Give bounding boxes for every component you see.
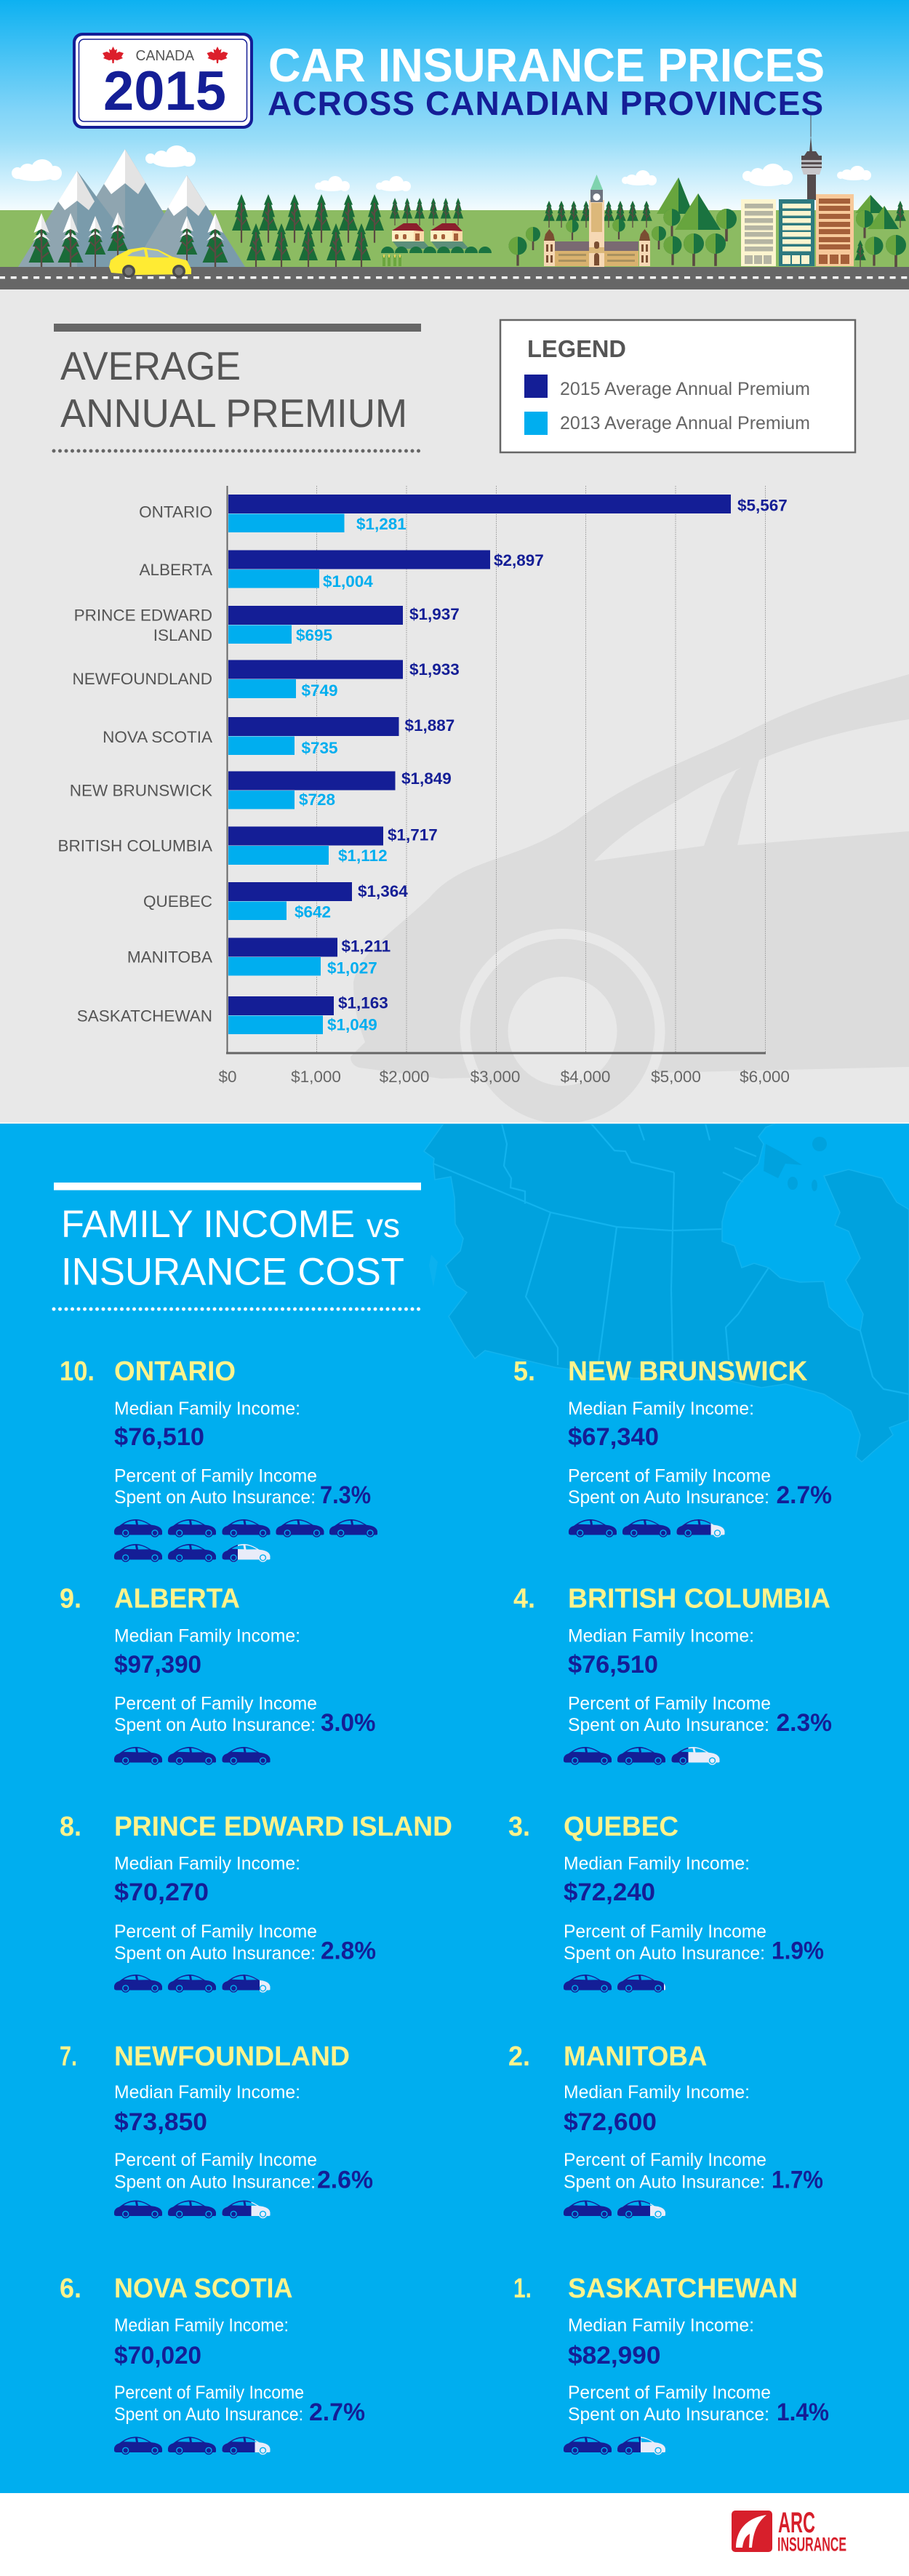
icon: car row (564, 2436, 665, 2455)
bars: British Columbia (57, 826, 438, 865)
bars: Alberta: $1,004 (323, 572, 373, 591)
icon: car row (114, 1975, 271, 1993)
rank 1: Saskatchewan: SASKATCHEWAN (568, 2273, 798, 2304)
rank 6: Nova Scotia: Median Family Income: (114, 2316, 289, 2336)
rank 8: Prince Edward Island: $70,270 (114, 1879, 209, 1906)
rank 2: Manitoba: Median Family Income: (564, 2082, 750, 2103)
bar chart (57, 486, 790, 1086)
title (268, 39, 825, 122)
rank 2: Manitoba: MANITOBA (564, 2041, 707, 2072)
legend: 2013 Average Annual Premium (560, 413, 810, 433)
CN tower (801, 115, 822, 200)
x axis labels: $1,000 (291, 1068, 341, 1086)
bars: Ontario: $1,281 (356, 515, 407, 533)
car watermark (351, 674, 909, 1129)
bars: Nova Scotia: $735 (301, 739, 338, 757)
rank 7: Newfoundland: Spent on Auto Insurance: (114, 2172, 316, 2192)
rank 4: British Columbia: Spent on Auto Insurance: (568, 1715, 769, 1735)
footer logo: ARC Insurance: INSURANCE (777, 2534, 846, 2556)
pine forest (232, 194, 463, 273)
bars: Newfoundland: $1,933 (409, 660, 460, 679)
rank 4: British Columbia: BRITISH COLUMBIA (568, 1584, 830, 1615)
bars: Ontario: $5,567 (737, 496, 788, 515)
legend: 2015 Average Annual Premium (560, 379, 810, 399)
rank 5: New Brunswick: NEW BRUNSWICK (568, 1356, 808, 1387)
rank 3: Quebec: Percent of Family Income (564, 1921, 766, 1942)
heading: ANNUAL PREMIUM (60, 391, 407, 436)
icon: car row (114, 2436, 271, 2455)
rank 3: Quebec: $72,240 (564, 1879, 655, 1906)
heading: vs (367, 1207, 400, 1244)
rank 4: British Columbia: Percent of Family Income (568, 1693, 771, 1713)
rank 7: Newfoundland: Median Family Income: (114, 2082, 300, 2103)
rank 3: Quebec: Spent on Auto Insurance: (564, 1943, 765, 1964)
bars: Alberta: $2,897 (494, 551, 544, 569)
rank 1: Saskatchewan: Spent on Auto Insurance: (568, 2404, 769, 2425)
bars: Prince Edward Island: $1,937 (409, 605, 460, 623)
x axis labels: $5,000 (651, 1068, 701, 1086)
bars: Alberta: ALBERTA (140, 561, 212, 579)
rank 9: Alberta: 9. (60, 1584, 81, 1615)
bars: Prince Edward Island: $695 (296, 626, 332, 644)
rank 5: New Brunswick: Percent of Family Income (568, 1466, 771, 1487)
panel: family income vs insurance cost (0, 1122, 909, 2493)
rank 8: Prince Edward Island: 8. (60, 1812, 81, 1842)
bars: Newfoundland: NEWFOUNDLAND (72, 670, 212, 688)
bars: Quebec: QUEBEC (143, 892, 212, 911)
bars: Newfoundland: $749 (301, 681, 338, 700)
rank 9: Alberta: Percent of Family Income (114, 1693, 317, 1713)
rank 1: Saskatchewan: 1.4% (777, 2399, 829, 2426)
bars: Nova Scotia: NOVA SCOTIA (103, 728, 212, 746)
rank 10: Ontario: 10. (60, 1356, 95, 1387)
bars: Manitoba: $1,211 (342, 937, 391, 956)
bars: New Brunswick (70, 769, 452, 809)
map of Canada watermark (424, 1124, 909, 1462)
bars: Alberta (140, 550, 544, 591)
rank 3: Quebec (508, 1812, 824, 1993)
rank 8: Prince Edward Island (60, 1812, 452, 1993)
rank 3: Quebec: 1.9% (772, 1937, 824, 1965)
rank 9: Alberta: Spent on Auto Insurance: (114, 1715, 316, 1735)
round trees (509, 201, 906, 268)
rank 10: Ontario: $76,510 (114, 1423, 204, 1451)
section bar (54, 324, 421, 332)
rank 9: Alberta: $97,390 (114, 1651, 201, 1679)
heading (60, 343, 407, 436)
rank 7: Newfoundland: $73,850 (114, 2108, 207, 2136)
rank 7: Newfoundland: 2.6% (317, 2166, 373, 2193)
rank 1: Saskatchewan: Percent of Family Income (568, 2383, 771, 2403)
icon: car row (564, 1747, 720, 1765)
licence plate badge (73, 33, 253, 129)
rank 2: Manitoba (508, 2041, 823, 2218)
bars: Quebec: $642 (295, 903, 331, 921)
mountains (18, 149, 245, 267)
legend (500, 320, 855, 452)
rank 8: Prince Edward Island: Percent of Family Income (114, 1921, 317, 1942)
heading: INSURANCE COST (61, 1251, 404, 1293)
ground (0, 210, 909, 267)
section bar (54, 1183, 421, 1190)
panel: average annual premium (0, 289, 909, 1129)
rank 6: Nova Scotia: 2.7% (309, 2399, 365, 2426)
bars: British Columbia: BRITISH COLUMBIA (57, 836, 212, 855)
rank 1: Saskatchewan: $82,990 (568, 2342, 660, 2369)
rank 6: Nova Scotia: $70,020 (114, 2342, 201, 2369)
x axis labels: $0 (218, 1068, 237, 1086)
rank 6: Nova Scotia: Spent on Auto Insurance: (114, 2404, 303, 2425)
rank 8: Prince Edward Island: Median Family Income: (114, 1853, 300, 1873)
rank 4: British Columbia: 4. (513, 1584, 535, 1615)
road (0, 267, 909, 289)
big conifers (657, 177, 899, 230)
rank 6: Nova Scotia (60, 2273, 365, 2455)
rank 2: Manitoba: Spent on Auto Insurance: (564, 2172, 765, 2192)
rank 6: Nova Scotia: Percent of Family Income (114, 2383, 304, 2403)
icon: car row (564, 1975, 665, 1993)
bars: Saskatchewan: $1,163 (338, 993, 388, 1012)
rank 9: Alberta: Median Family Income: (114, 1626, 300, 1647)
rank 10: Ontario: ONTARIO (114, 1356, 236, 1387)
snowy pine trees (29, 212, 228, 286)
bars: Prince Edward Island (74, 605, 460, 644)
bars: British Columbia: $1,112 (338, 847, 388, 865)
parliament building (544, 175, 650, 267)
bars: Manitoba: $1,027 (327, 959, 377, 977)
rank 4: British Columbia: Median Family Income: (568, 1626, 754, 1647)
heading: FAMILY INCOME (61, 1203, 355, 1246)
rank 10: Ontario: Percent of Family Income (114, 1466, 317, 1487)
title: ACROSS CANADIAN PROVINCES (268, 84, 823, 122)
rank 5: New Brunswick: Spent on Auto Insurance: (568, 1487, 769, 1508)
bars: Prince Edward Island: PRINCE EDWARD (74, 607, 212, 624)
rank 6: Nova Scotia: NOVA SCOTIA (114, 2273, 292, 2304)
pines behind parliament (543, 201, 652, 228)
bars: Manitoba: MANITOBA (127, 948, 212, 966)
bars: Nova Scotia: $1,887 (404, 716, 454, 735)
rank 4: British Columbia: $76,510 (568, 1651, 658, 1679)
rank 7: Newfoundland: NEWFOUNDLAND (114, 2041, 350, 2072)
rank 10: Ontario: 7.3% (320, 1481, 371, 1509)
rank 2: Manitoba: $72,600 (564, 2108, 657, 2136)
rank 8: Prince Edward Island: 2.8% (321, 1937, 376, 1965)
rank 9: Alberta (60, 1584, 375, 1765)
heading: AVERAGE (60, 343, 241, 388)
rank 8: Prince Edward Island: PRINCE EDWARD ISLAND (114, 1812, 452, 1842)
bars: Saskatchewan (77, 993, 388, 1034)
rank 10: Ontario: Spent on Auto Insurance: (114, 1487, 316, 1508)
rank 5: New Brunswick: Median Family Income: (568, 1399, 754, 1419)
rank 10: Ontario: Median Family Income: (114, 1399, 300, 1419)
plate text: Canada: CANADA (135, 48, 195, 64)
header panel: sky and landscape (0, 0, 909, 289)
rank 5: New Brunswick: 2.7% (777, 1481, 832, 1509)
bars: Prince Edward Island: ISLAND (153, 626, 212, 644)
bars: Nova Scotia (103, 716, 454, 757)
footer logo: ARC Insurance: ARC (778, 2507, 815, 2539)
rank 9: Alberta: 3.0% (321, 1709, 375, 1737)
x axis labels (218, 1068, 790, 1086)
heading (61, 1203, 404, 1293)
bars: Quebec (143, 882, 408, 921)
rank 4: British Columbia (513, 1584, 832, 1765)
title: CAR INSURANCE PRICES (268, 39, 825, 92)
rank 10: Ontario (60, 1356, 377, 1562)
rank 3: Quebec: Median Family Income: (564, 1853, 750, 1873)
rank 2: Manitoba: Percent of Family Income (564, 2150, 766, 2170)
x axis labels: $3,000 (470, 1068, 520, 1086)
icon: maple leaf (103, 47, 124, 63)
clouds (12, 145, 871, 191)
bars: New Brunswick: NEW BRUNSWICK (70, 781, 212, 800)
legend: LEGEND (527, 335, 626, 362)
icon: yellow car (109, 247, 191, 278)
icon: car row (114, 1519, 377, 1562)
rank 1: Saskatchewan (513, 2273, 829, 2455)
bars: Newfoundland (72, 660, 460, 700)
icon: maple leaf (207, 47, 228, 63)
icon: car row (564, 2201, 665, 2218)
bars: Saskatchewan: SASKATCHEWAN (77, 1007, 212, 1025)
bars: Quebec: $1,364 (358, 882, 408, 900)
rank 5: New Brunswick: $67,340 (568, 1423, 659, 1451)
rank 5: New Brunswick (513, 1356, 832, 1537)
icon: car row (569, 1519, 724, 1537)
bars: British Columbia: $1,717 (388, 826, 438, 844)
houses and bushes (381, 223, 492, 266)
rank 7: Newfoundland: 7. (60, 2041, 77, 2072)
rank 7: Newfoundland: Percent of Family Income (114, 2150, 317, 2170)
rank 3: Quebec: QUEBEC (564, 1812, 678, 1842)
x axis labels: $4,000 (561, 1068, 610, 1086)
bars: New Brunswick: $1,849 (401, 769, 452, 788)
rank 1: Saskatchewan: Median Family Income: (568, 2316, 754, 2336)
bars: Saskatchewan: $1,049 (327, 1015, 377, 1034)
bars: New Brunswick: $728 (299, 791, 335, 809)
rank 2: Manitoba: 2. (508, 2041, 530, 2072)
x axis labels: $6,000 (740, 1068, 790, 1086)
rank 2: Manitoba: 1.7% (772, 2166, 823, 2193)
rank 5: New Brunswick: 5. (513, 1356, 535, 1387)
x axis labels: $2,000 (380, 1068, 429, 1086)
rank 1: Saskatchewan: 1. (513, 2273, 532, 2304)
plate text: 2015: 2015 (103, 60, 226, 122)
icon: car row (114, 2201, 271, 2218)
bars: Ontario (139, 495, 788, 533)
rank 6: Nova Scotia: 6. (60, 2273, 81, 2304)
rank 7: Newfoundland (60, 2041, 373, 2218)
buildings (741, 194, 854, 266)
footer logo: ARC Insurance (732, 2507, 846, 2556)
icon: car row (114, 1747, 271, 1765)
rank 3: Quebec: 3. (508, 1812, 530, 1842)
bars: Ontario: ONTARIO (139, 503, 212, 521)
rank 4: British Columbia: 2.3% (777, 1709, 832, 1737)
rank 8: Prince Edward Island: Spent on Auto Insurance: (114, 1943, 316, 1964)
rank 9: Alberta: ALBERTA (114, 1584, 240, 1615)
bars: Manitoba (127, 937, 391, 977)
